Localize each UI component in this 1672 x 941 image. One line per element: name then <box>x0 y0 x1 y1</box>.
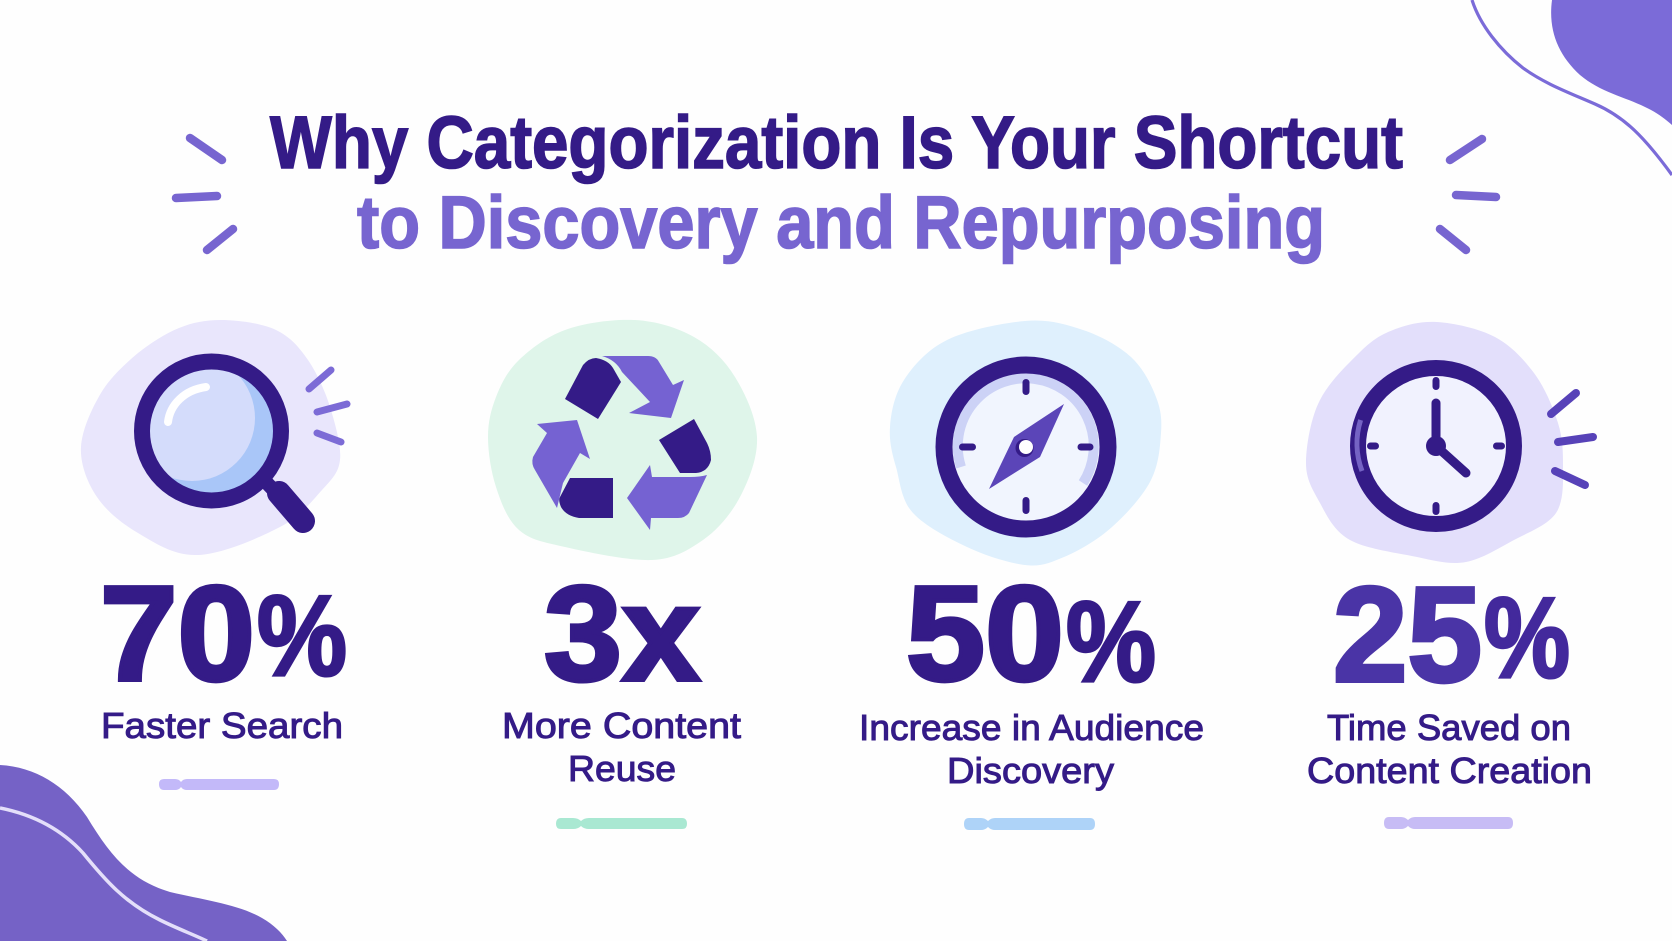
label: increase in audience discovery <box>859 707 1204 791</box>
icon: clock <box>1357 368 1593 524</box>
icon backdrop: green blob <box>488 320 757 560</box>
panel: faster search <box>81 320 347 790</box>
panel: time saved <box>1306 322 1593 829</box>
title <box>270 101 1403 264</box>
label: faster search: Faster Search <box>101 705 343 746</box>
stat: 70%: 70 <box>100 558 255 709</box>
icon: compass <box>944 365 1108 529</box>
stat: 25% <box>1333 559 1570 710</box>
title burst left <box>176 138 233 250</box>
title burst right <box>1440 139 1496 250</box>
label: more content reuse <box>502 705 741 789</box>
panel: audience discovery <box>859 321 1204 830</box>
label: more content reuse: More Content <box>502 705 741 746</box>
panel: content reuse <box>488 320 757 829</box>
stat: 25%: % <box>1484 575 1570 702</box>
label: increase in audience discovery: Increase in Audience <box>859 707 1204 748</box>
decorative corner: top right blob and line <box>1472 0 1672 175</box>
stat: 25%: 25 <box>1333 559 1482 710</box>
stat: 50%: 50 <box>906 558 1064 709</box>
accent bar <box>964 818 1095 830</box>
icon backdrop: lavender blob <box>81 320 340 555</box>
icon: magnifying glass <box>129 355 347 521</box>
label: time saved on content creation <box>1307 707 1592 791</box>
stat: 50%: % <box>1066 579 1156 706</box>
label: time saved on content creation: Time Saved on <box>1327 707 1571 748</box>
stat: 70%: % <box>257 573 347 700</box>
stat: 3x: 3x <box>544 558 700 709</box>
label: more content reuse: Reuse <box>568 748 676 789</box>
accent bar <box>159 779 279 790</box>
stat: 50% <box>906 558 1156 709</box>
accent bar <box>1384 817 1513 829</box>
label: increase in audience discovery: Discovery <box>947 750 1114 791</box>
icon backdrop: lilac blob <box>1306 322 1563 563</box>
title line 2: to Discovery and Repurposing <box>357 181 1325 264</box>
stat: 70% <box>100 558 347 709</box>
accent bar <box>556 818 687 829</box>
icon backdrop: blue blob <box>890 321 1161 566</box>
icon: recycle arrows <box>532 356 711 530</box>
decorative corner: bottom left blob and line <box>0 765 287 941</box>
label: time saved on content creation: Content Creation <box>1307 750 1592 791</box>
title line 1: Why Categorization Is Your Shortcut <box>270 101 1403 184</box>
